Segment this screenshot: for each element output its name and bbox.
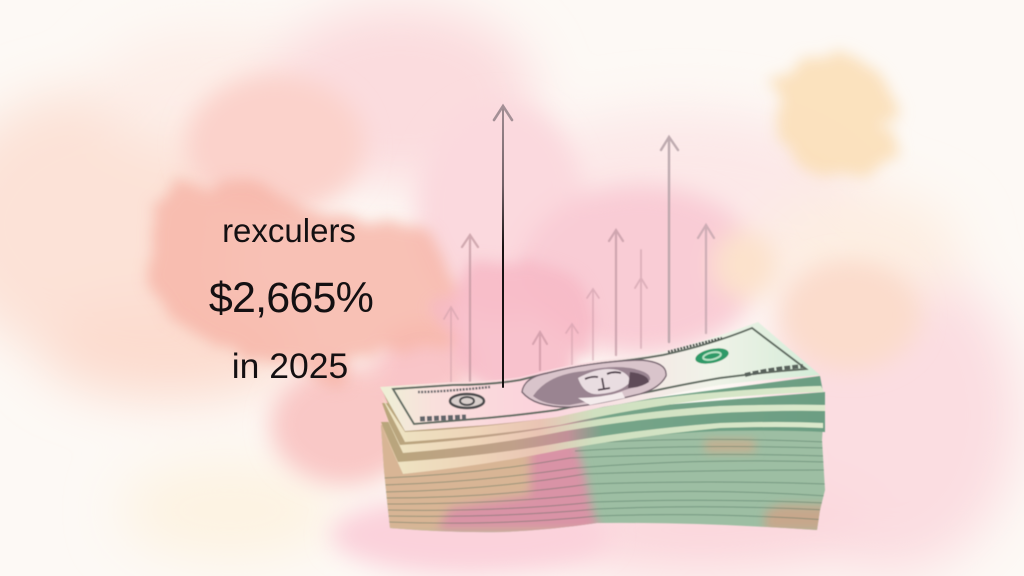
stack body [380,424,826,533]
arrow 2 [462,235,478,382]
right green seal [694,346,730,366]
text block: statistic [209,212,373,386]
serial number marks [418,387,490,392]
offset bill layers [380,376,825,474]
main arrow [494,106,512,387]
top bill [380,322,820,431]
bill engraved border [393,328,806,424]
arrow 8 [661,137,678,342]
faint arrow 1 [444,307,458,385]
arrow 3 faint [533,332,547,370]
value: $2,665%: $2,665% [209,274,373,322]
arrow 5 faint [587,289,599,360]
arrow 9 [698,225,714,333]
portrait of Franklin [522,360,666,407]
arrow 7 faint [635,250,647,348]
arrow 6 [609,230,623,355]
arrow 4 faint [566,324,578,365]
left seal [450,394,484,408]
stack of dollar bills [380,104,826,533]
label: in 2025: in 2025 [232,346,348,386]
label: rexculers: rexculers [222,212,356,249]
